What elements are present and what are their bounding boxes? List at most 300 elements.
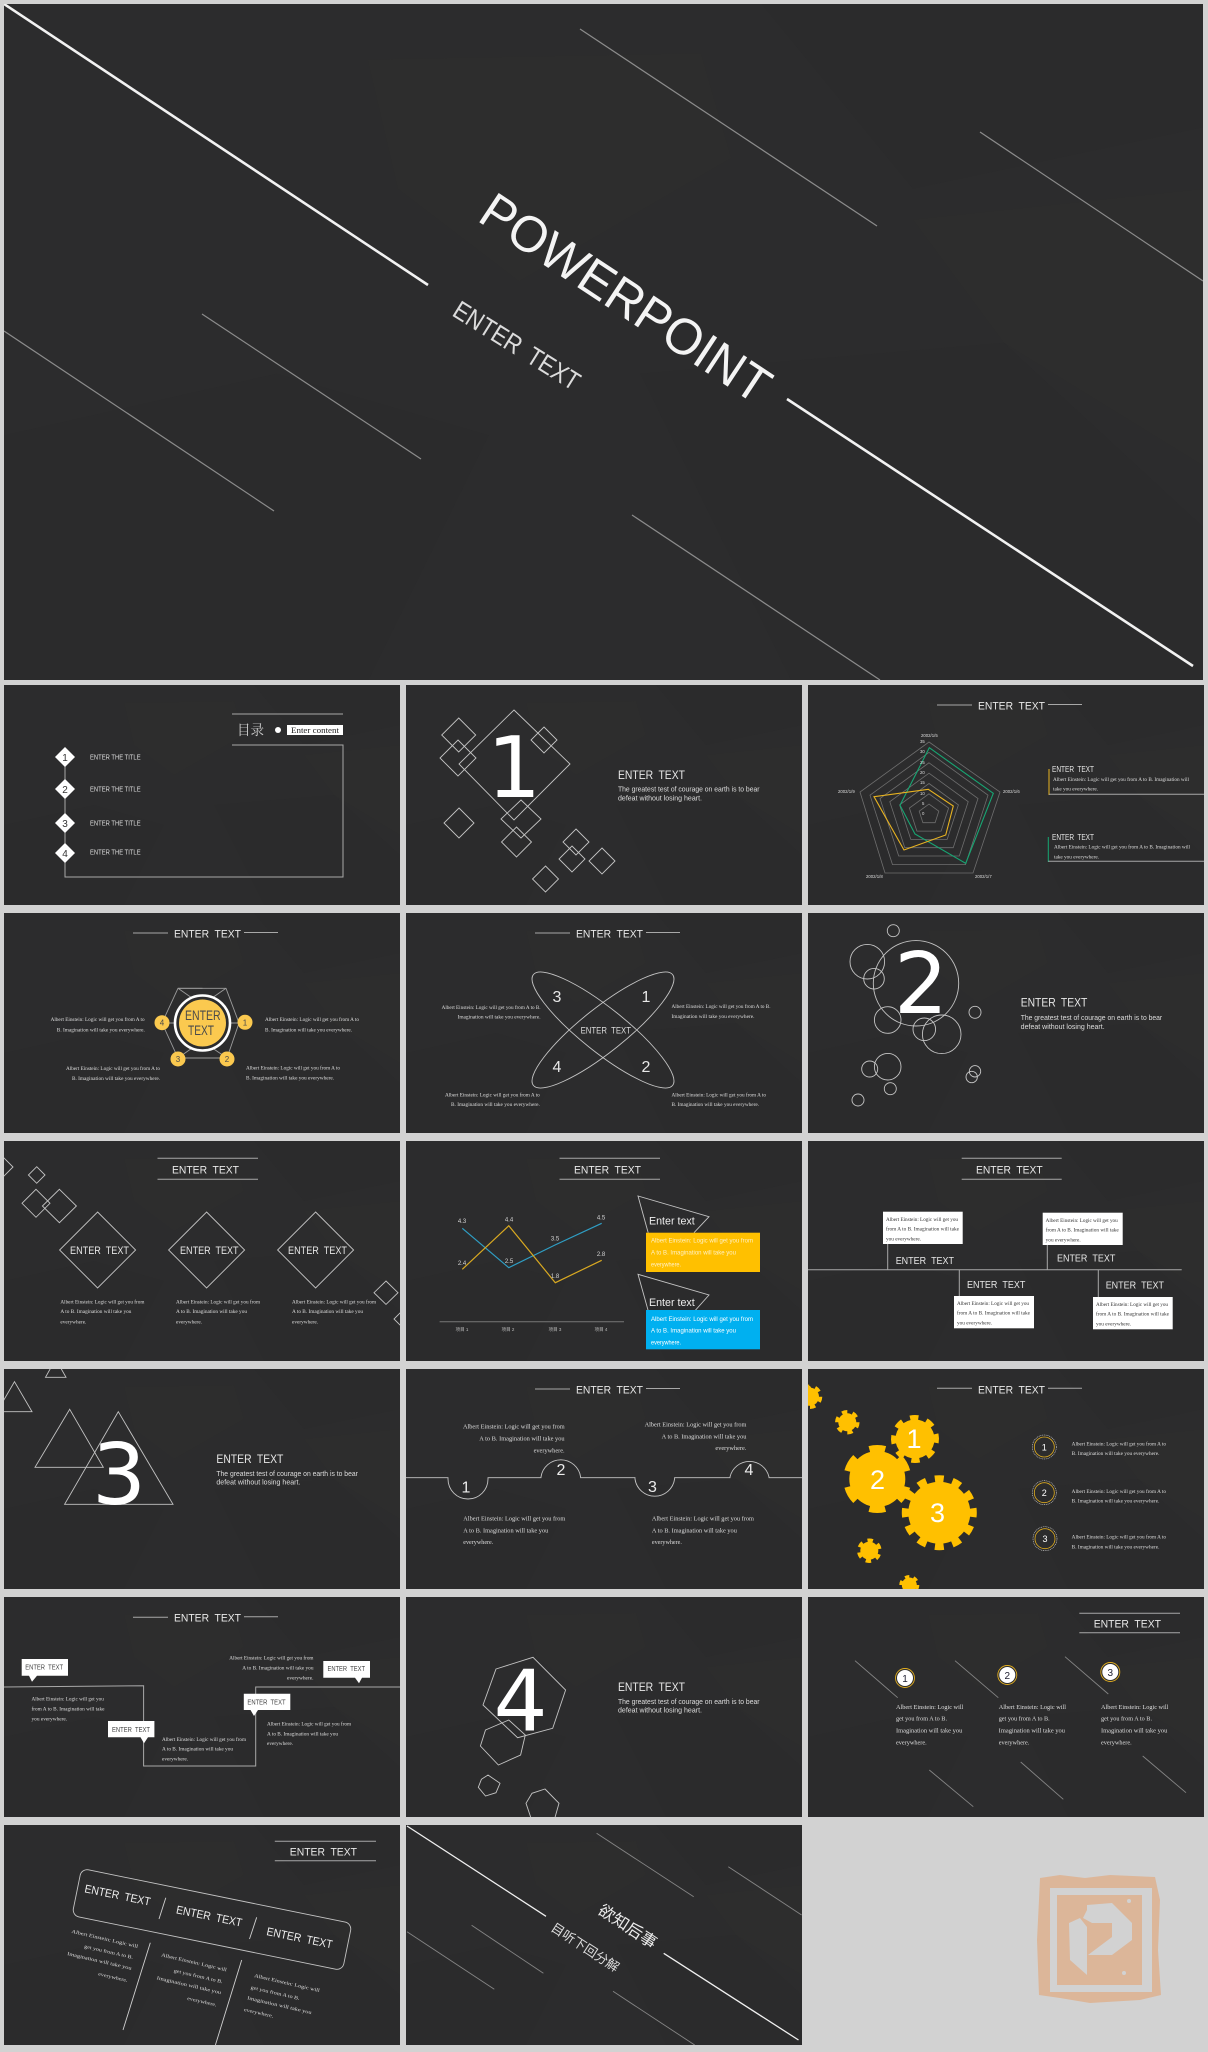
section number: 2 <box>894 935 948 1034</box>
rotated text blocks: get you from A to B. <box>173 1969 223 1985</box>
timeline item 3: you everywhere. <box>1046 1238 1081 1243</box>
text blocks: everywhere. <box>162 1757 188 1762</box>
contents list <box>55 747 141 863</box>
data labels: 2.5 <box>505 1259 514 1265</box>
contents list: 4 <box>62 849 68 860</box>
text blocks: Imagination will take you everywhere. <box>458 1016 541 1021</box>
panel: section 1 slide <box>406 685 802 905</box>
timeline item 4 <box>1093 1281 1173 1329</box>
axis labels: 35 <box>920 739 925 744</box>
numbered nodes: 1 <box>243 1018 248 1027</box>
contents list: ENTER THE TITLE <box>90 820 141 828</box>
timeline item 3 <box>1043 1213 1123 1264</box>
callout: yellow: everywhere. <box>651 1262 681 1268</box>
text blocks: everywhere. <box>292 1320 318 1325</box>
column 2: get you from A to B. <box>999 1716 1050 1723</box>
text blocks: Albert Einstein: Logic will get you from <box>463 1516 566 1523</box>
numbered nodes <box>154 1015 252 1066</box>
heading <box>275 1841 376 1861</box>
rotated text blocks: Albert Einstein: Logic will <box>71 1930 139 1950</box>
callout: blue: Albert Einstein: Logic will get you from <box>651 1317 753 1323</box>
axis labels: 20 <box>920 770 925 775</box>
text blocks: B. Imagination will take you everywhere. <box>265 1028 352 1033</box>
ellipse numbers <box>553 989 651 1076</box>
callout: yellow <box>638 1196 760 1272</box>
text blocks: Albert Einstein: Logic will get you from A to <box>51 1018 145 1023</box>
text blocks: Albert Einstein: Logic will get you from <box>162 1738 246 1743</box>
timeline item 1: from A to B. Imagination will take <box>886 1228 960 1233</box>
cover subtitle: ENTER TEXT <box>448 295 586 396</box>
callout: yellow: Albert Einstein: Logic will get you from <box>651 1239 753 1245</box>
legend item: yellow: Albert Einstein: Logic will get you from A to B. Imagination will <box>1053 778 1190 783</box>
step numbers: 3 <box>648 1479 657 1496</box>
text blocks <box>442 1005 770 1108</box>
rotated text blocks: Imagination will take you <box>247 1996 313 2016</box>
series: yellow <box>462 1226 602 1283</box>
text blocks: A to B. Imagination will take you <box>652 1528 737 1534</box>
section description: defeat without losing heart. <box>216 1480 300 1487</box>
cover main diagonal line, lower <box>787 399 1193 666</box>
list item 1 <box>1032 1435 1167 1459</box>
text blocks: everywhere. <box>534 1448 565 1454</box>
callout 4: ENTER TEXT <box>112 1727 151 1734</box>
step numbers: 2 <box>557 1462 566 1479</box>
heading <box>962 1158 1062 1179</box>
column 2: everywhere. <box>999 1739 1030 1746</box>
timeline item 1 <box>883 1212 963 1267</box>
text blocks: B. Imagination will take you everywhere. <box>672 1103 759 1108</box>
banner labels: ENTER TEXT <box>265 1926 333 1951</box>
timeline item 4: ENTER TEXT <box>1106 1281 1164 1292</box>
column 1: 1 <box>902 1674 908 1685</box>
section description: defeat without losing heart. <box>618 1708 702 1715</box>
rotated text blocks: get you from A to B. <box>250 1986 300 2002</box>
data labels <box>458 1215 606 1280</box>
rotated text blocks: everywhere. <box>98 1972 128 1984</box>
icon: triangles <box>0 1359 173 1504</box>
text blocks: everywhere. <box>463 1540 494 1546</box>
timeline item 2: ENTER TEXT <box>967 1280 1025 1291</box>
tilted banner <box>72 1868 352 1971</box>
timeline item 3: Albert Einstein: Logic will get you <box>1046 1219 1118 1224</box>
contents list: 2 <box>62 785 68 796</box>
section description: The greatest test of courage on earth is to bear <box>618 1699 760 1706</box>
gear 3 <box>901 1475 977 1551</box>
icon: stamp watermark <box>1037 1875 1161 2003</box>
legend item: yellow: take you everywhere. <box>1053 788 1098 793</box>
panel: timeline slide <box>808 1141 1204 1361</box>
text blocks <box>60 1300 376 1325</box>
column 3: Albert Einstein: Logic will <box>1101 1704 1169 1711</box>
text blocks: Albert Einstein: Logic will get you from A to <box>66 1067 161 1072</box>
contents tag: Enter content <box>291 726 340 735</box>
panel: contents slide <box>4 685 400 905</box>
timeline item 4: from A to B. Imagination will take <box>1096 1313 1170 1318</box>
cover thin diagonal lines <box>4 29 1203 680</box>
text blocks: Albert Einstein: Logic will get you from <box>229 1656 314 1661</box>
text blocks: Albert Einstein: Logic will get you from A to <box>265 1018 360 1023</box>
panel: section 4 slide <box>406 1597 802 1821</box>
gear 1: 1 <box>906 1424 922 1454</box>
numbered nodes: 4 <box>160 1019 165 1028</box>
section description <box>618 1699 760 1715</box>
crossed ellipses <box>532 972 674 1088</box>
callout 2: ENTER TEXT <box>328 1666 366 1673</box>
text blocks: everywhere. <box>287 1676 314 1681</box>
text blocks: B. Imagination will take you everywhere. <box>57 1028 145 1033</box>
cover title: POWERPOINT <box>470 182 782 415</box>
heading <box>560 1158 660 1179</box>
callout: blue: Enter text <box>649 1297 695 1309</box>
timeline item 3: from A to B. Imagination will take <box>1046 1229 1120 1234</box>
list item 2 <box>1032 1481 1167 1505</box>
rotated text blocks: Imagination will take you <box>156 1976 222 1996</box>
text blocks: B. Imagination will take you everywhere. <box>451 1103 540 1108</box>
data labels: 2.8 <box>597 1252 606 1258</box>
axis labels: 项目 3 <box>549 1327 562 1333</box>
callout: yellow: Enter text <box>649 1215 695 1227</box>
column 1: Imagination will take you <box>896 1728 963 1735</box>
icon: hexagons <box>478 1657 566 1821</box>
panel: radar chart slide <box>808 685 1204 905</box>
panel: hub diagram slide <box>4 913 400 1133</box>
axis labels: 5 <box>922 801 925 806</box>
section description: The greatest test of courage on earth is to bear <box>1021 1015 1163 1022</box>
text blocks: A to B. Imagination will take you <box>267 1732 339 1737</box>
axis labels: 25 <box>920 760 925 765</box>
banner dividers <box>123 1898 257 2045</box>
axis labels: 2002/1/7 <box>975 874 992 879</box>
data labels: 4.4 <box>505 1218 514 1224</box>
text blocks: A to B. Imagination will take you <box>162 1748 234 1753</box>
diamond 3 <box>278 1212 354 1288</box>
callout 3 <box>244 1694 290 1716</box>
rotated text blocks: Imagination will take you <box>67 1952 133 1972</box>
callout 3: ENTER TEXT <box>247 1700 286 1707</box>
data labels: 3.5 <box>551 1237 560 1243</box>
text blocks: Albert Einstein: Logic will get you from <box>292 1300 376 1305</box>
callout 2 <box>323 1661 370 1683</box>
axis labels: 10 <box>920 791 925 796</box>
list item 3 <box>1033 1527 1167 1551</box>
contents list: ENTER THE TITLE <box>90 754 141 762</box>
section heading: ENTER TEXT <box>1021 996 1088 1010</box>
section heading: ENTER TEXT <box>618 1680 686 1694</box>
text blocks: Imagination will take you everywhere. <box>672 1015 754 1020</box>
text blocks: Albert Einstein: Logic will get you from A to B. <box>672 1005 770 1010</box>
text blocks: from A to B. Imagination will take <box>32 1708 105 1713</box>
gear 1 <box>890 1414 940 1464</box>
data labels: 1.8 <box>551 1274 560 1280</box>
decorative diamonds <box>0 1155 414 1329</box>
legend item: green <box>1048 833 1204 862</box>
timeline item 1: ENTER TEXT <box>896 1256 954 1267</box>
rotated text blocks: Albert Einstein: Logic will <box>254 1974 321 1994</box>
timeline item 4: Albert Einstein: Logic will get you <box>1096 1303 1169 1308</box>
callout: blue: everywhere. <box>651 1340 681 1346</box>
section heading: ENTER TEXT <box>216 1452 284 1466</box>
timeline item 2: from A to B. Imagination will take <box>957 1312 1031 1317</box>
heading: ENTER TEXT <box>576 1384 643 1396</box>
callout 1: ENTER TEXT <box>25 1664 64 1671</box>
panel: three columns slide <box>808 1597 1204 1817</box>
text blocks: Albert Einstein: Logic will get you from <box>176 1300 260 1305</box>
section description: defeat without losing heart. <box>1021 1024 1105 1031</box>
rotated text blocks: everywhere. <box>243 2008 274 2020</box>
closing main diagonal lines <box>407 1826 798 2040</box>
text blocks: Albert Einstein: Logic will get you from <box>645 1421 747 1428</box>
gear 3: 3 <box>930 1498 945 1528</box>
line chart <box>440 1215 624 1333</box>
section number: 1 <box>487 719 541 818</box>
icon: diamonds <box>440 710 615 892</box>
numbered nodes: 3 <box>176 1055 181 1064</box>
column 1: get you from A to B. <box>896 1716 947 1723</box>
series: blue <box>462 1223 602 1268</box>
panel: step path slide <box>4 1597 400 1817</box>
text blocks: A to B. Imagination will take you <box>242 1666 314 1671</box>
small gears <box>800 1386 918 1594</box>
axis labels: 2002/1/6 <box>1003 789 1020 794</box>
legend item: green: ENTER TEXT <box>1052 833 1094 842</box>
diagonal accents <box>855 1657 1186 1807</box>
data labels: 2.4 <box>458 1261 467 1267</box>
text blocks <box>463 1421 754 1546</box>
diamond 1 <box>60 1212 136 1288</box>
callout: blue: A to B. Imagination will take you <box>651 1329 736 1335</box>
list item 2: Albert Einstein: Logic will get you from A to <box>1072 1490 1167 1495</box>
callout: yellow: A to B. Imagination will take you <box>651 1251 736 1257</box>
closing thin diagonal lines <box>407 1833 802 2045</box>
legend item: yellow <box>1049 765 1204 795</box>
text blocks: Albert Einstein: Logic will get you from <box>463 1424 565 1431</box>
panel: tilted banner slide <box>4 1825 400 2045</box>
list item 3: 3 <box>1042 1534 1048 1544</box>
list item 3: B. Imagination will take you everywhere. <box>1072 1545 1159 1550</box>
contents heading: 目录 <box>237 720 264 740</box>
data labels: 4.3 <box>458 1219 467 1225</box>
heading: ENTER TEXT <box>1094 1619 1161 1631</box>
diamond 2 <box>169 1212 245 1288</box>
series: yellow <box>874 789 953 850</box>
rotated text blocks <box>67 1930 321 2020</box>
contents list: ENTER THE TITLE <box>90 786 141 794</box>
diamond 1: ENTER TEXT <box>70 1245 129 1257</box>
heading: ENTER TEXT <box>172 1164 239 1176</box>
list item 1: B. Imagination will take you everywhere. <box>1072 1452 1159 1457</box>
timeline item 1: you everywhere. <box>886 1237 921 1242</box>
heading <box>158 1158 258 1179</box>
legend item: green: Albert Einstein: Logic will get you from A to B. Imagination will <box>1054 845 1191 850</box>
diamond 3: ENTER TEXT <box>288 1245 347 1257</box>
text blocks: A to B. Imagination will take you <box>60 1310 132 1315</box>
axis labels: 30 <box>920 749 925 754</box>
column 2: Imagination will take you <box>999 1728 1066 1735</box>
centre label: ENTER TEXT <box>581 1025 631 1035</box>
column 3: Imagination will take you <box>1101 1728 1168 1735</box>
hub circle: ENTER <box>185 1007 221 1023</box>
banner labels: ENTER TEXT <box>83 1883 151 1909</box>
list item 3: Albert Einstein: Logic will get you from A to <box>1072 1536 1167 1541</box>
column 3: 3 <box>1108 1668 1114 1679</box>
text blocks: everywhere. <box>715 1446 747 1452</box>
section description <box>618 787 760 803</box>
text blocks <box>51 1018 360 1082</box>
text blocks: you everywhere. <box>32 1718 67 1723</box>
gear 2 <box>840 1442 915 1516</box>
text blocks <box>32 1656 351 1762</box>
column 2: 2 <box>1005 1671 1011 1682</box>
panel: wave steps slide <box>406 1369 802 1589</box>
timeline axis <box>808 1244 1182 1297</box>
axis labels: 0 <box>922 811 925 816</box>
legend item: green: take you everywhere. <box>1054 855 1099 860</box>
step numbers: 4 <box>745 1462 754 1479</box>
text blocks: Albert Einstein: Logic will get you <box>32 1698 104 1703</box>
data labels: 4.5 <box>597 1215 606 1221</box>
panel: section 3 slide <box>0 1359 400 1589</box>
text blocks: B. Imagination will take you everywhere. <box>72 1077 160 1082</box>
text blocks: A to B. Imagination will take you <box>479 1436 565 1442</box>
axis labels: 15 <box>920 780 925 785</box>
text blocks: A to B. Imagination will take you <box>292 1310 364 1315</box>
panel: cover slide <box>4 4 1204 682</box>
text blocks: A to B. Imagination will take you <box>463 1528 548 1534</box>
step numbers <box>462 1462 754 1496</box>
ellipse numbers: 4 <box>553 1059 562 1076</box>
section number: 4 <box>493 1653 548 1752</box>
panel: three diamonds slide <box>0 1141 414 1361</box>
numbered nodes: 2 <box>225 1055 230 1064</box>
heading: ENTER TEXT <box>978 1384 1045 1396</box>
step path line <box>4 1686 400 1766</box>
column 2: Albert Einstein: Logic will <box>999 1704 1066 1711</box>
heading: ENTER TEXT <box>174 1613 241 1625</box>
axis labels <box>838 733 1020 879</box>
rotated text blocks: get you from A to B. <box>84 1945 133 1961</box>
column 2 <box>998 1666 1066 1746</box>
axis labels: 2002/1/9 <box>838 789 855 794</box>
ellipse numbers: 3 <box>553 989 562 1006</box>
rotated text blocks: everywhere. <box>187 1997 217 2008</box>
text blocks: Albert Einstein: Logic will get you from A to <box>672 1093 767 1098</box>
contents tag <box>287 725 343 735</box>
timeline item 2: Albert Einstein: Logic will get you <box>957 1302 1030 1307</box>
cover main diagonal line, upper <box>4 4 428 285</box>
section number: 3 <box>92 1426 146 1525</box>
contents dot <box>275 727 281 733</box>
text blocks: B. Imagination will take you everywhere. <box>246 1077 334 1082</box>
hub circle <box>175 996 230 1050</box>
column 1: Albert Einstein: Logic will <box>896 1704 964 1711</box>
panel: section 2 slide <box>808 913 1204 1133</box>
closing subtitle: 目听下回分解 <box>548 1917 624 1976</box>
heading <box>1079 1613 1180 1633</box>
axis labels: 2002/1/8 <box>866 874 883 879</box>
panel: crossed ellipses slide <box>406 913 802 1133</box>
text blocks: everywhere. <box>652 1540 682 1546</box>
heading: ENTER TEXT <box>976 1164 1043 1176</box>
list item 1: Albert Einstein: Logic will get you from A to <box>1072 1442 1167 1447</box>
hexagon network <box>162 988 239 1058</box>
column 1 <box>896 1668 964 1746</box>
section description: defeat without losing heart. <box>618 796 702 803</box>
ellipse numbers: 2 <box>642 1059 651 1076</box>
contents list: ENTER THE TITLE <box>90 850 141 856</box>
timeline item 2 <box>954 1280 1034 1328</box>
section description <box>216 1471 359 1487</box>
axis labels: 项目 1 <box>456 1327 469 1333</box>
column 3: everywhere. <box>1101 1739 1132 1746</box>
radar chart <box>838 733 1020 879</box>
contents list: 1 <box>62 753 68 764</box>
ellipse numbers: 1 <box>642 989 651 1006</box>
heading: ENTER TEXT <box>978 700 1045 712</box>
text blocks: A to B. Imagination will take you <box>662 1434 746 1440</box>
timeline item 2: you everywhere. <box>957 1321 992 1326</box>
heading: ENTER TEXT <box>290 1847 357 1859</box>
legend item: yellow: ENTER TEXT <box>1052 765 1094 774</box>
column 3 <box>1101 1662 1169 1746</box>
text blocks: Albert Einstein: Logic will get you from <box>267 1722 351 1727</box>
heading: ENTER TEXT <box>576 928 643 940</box>
section description <box>1021 1015 1163 1031</box>
text blocks: Albert Einstein: Logic will get you from A to B. <box>442 1006 541 1011</box>
contents list: 3 <box>62 819 68 830</box>
heading: ENTER TEXT <box>574 1164 641 1176</box>
axis labels: 项目 2 <box>502 1327 515 1333</box>
section description: The greatest test of courage on earth is to bear <box>216 1471 359 1478</box>
list item 2: 2 <box>1042 1488 1047 1498</box>
timeline item 1: Albert Einstein: Logic will get you <box>886 1218 959 1223</box>
icon: circles <box>850 925 981 1106</box>
axis labels: 2002/1/5 <box>921 733 938 738</box>
heading: ENTER TEXT <box>174 928 241 940</box>
text blocks: Albert Einstein: Logic will get you from <box>652 1516 754 1523</box>
panel: closing slide <box>406 1825 802 2045</box>
text blocks: A to B. Imagination will take you <box>176 1310 248 1315</box>
banner labels: ENTER TEXT <box>175 1904 243 1930</box>
column 1: everywhere. <box>896 1739 927 1746</box>
timeline item 4: you everywhere. <box>1096 1322 1131 1327</box>
stamp letter P <box>1069 1899 1132 1975</box>
callout 4 <box>108 1721 154 1743</box>
text blocks: Albert Einstein: Logic will get you from A to <box>445 1093 540 1098</box>
panel: line chart slide <box>406 1141 802 1361</box>
wave line <box>406 1460 802 1499</box>
panel: gears slide <box>800 1369 1204 1594</box>
axis labels <box>456 1327 608 1333</box>
banner labels <box>83 1883 333 1951</box>
step numbers: 1 <box>462 1480 471 1496</box>
list item 1: 1 <box>1042 1442 1047 1452</box>
rotated text blocks: Albert Einstein: Logic will <box>161 1953 228 1973</box>
text blocks: everywhere. <box>60 1320 86 1325</box>
closing title: 欲知后事 <box>594 1897 663 1953</box>
timeline item 3: ENTER TEXT <box>1057 1253 1115 1264</box>
text blocks: everywhere. <box>267 1742 293 1747</box>
contents frame <box>65 714 343 877</box>
gear 2: 2 <box>870 1465 885 1495</box>
text blocks: Albert Einstein: Logic will get you from A to <box>246 1067 341 1072</box>
callout: blue <box>638 1274 760 1349</box>
section description: The greatest test of courage on earth is to bear <box>618 787 760 794</box>
text blocks: Albert Einstein: Logic will get you from <box>60 1300 145 1305</box>
diamond 2: ENTER TEXT <box>180 1245 239 1257</box>
column 3: get you from A to B. <box>1101 1716 1152 1723</box>
axis labels: 项目 4 <box>595 1327 608 1333</box>
list item 2: B. Imagination will take you everywhere. <box>1072 1500 1159 1505</box>
